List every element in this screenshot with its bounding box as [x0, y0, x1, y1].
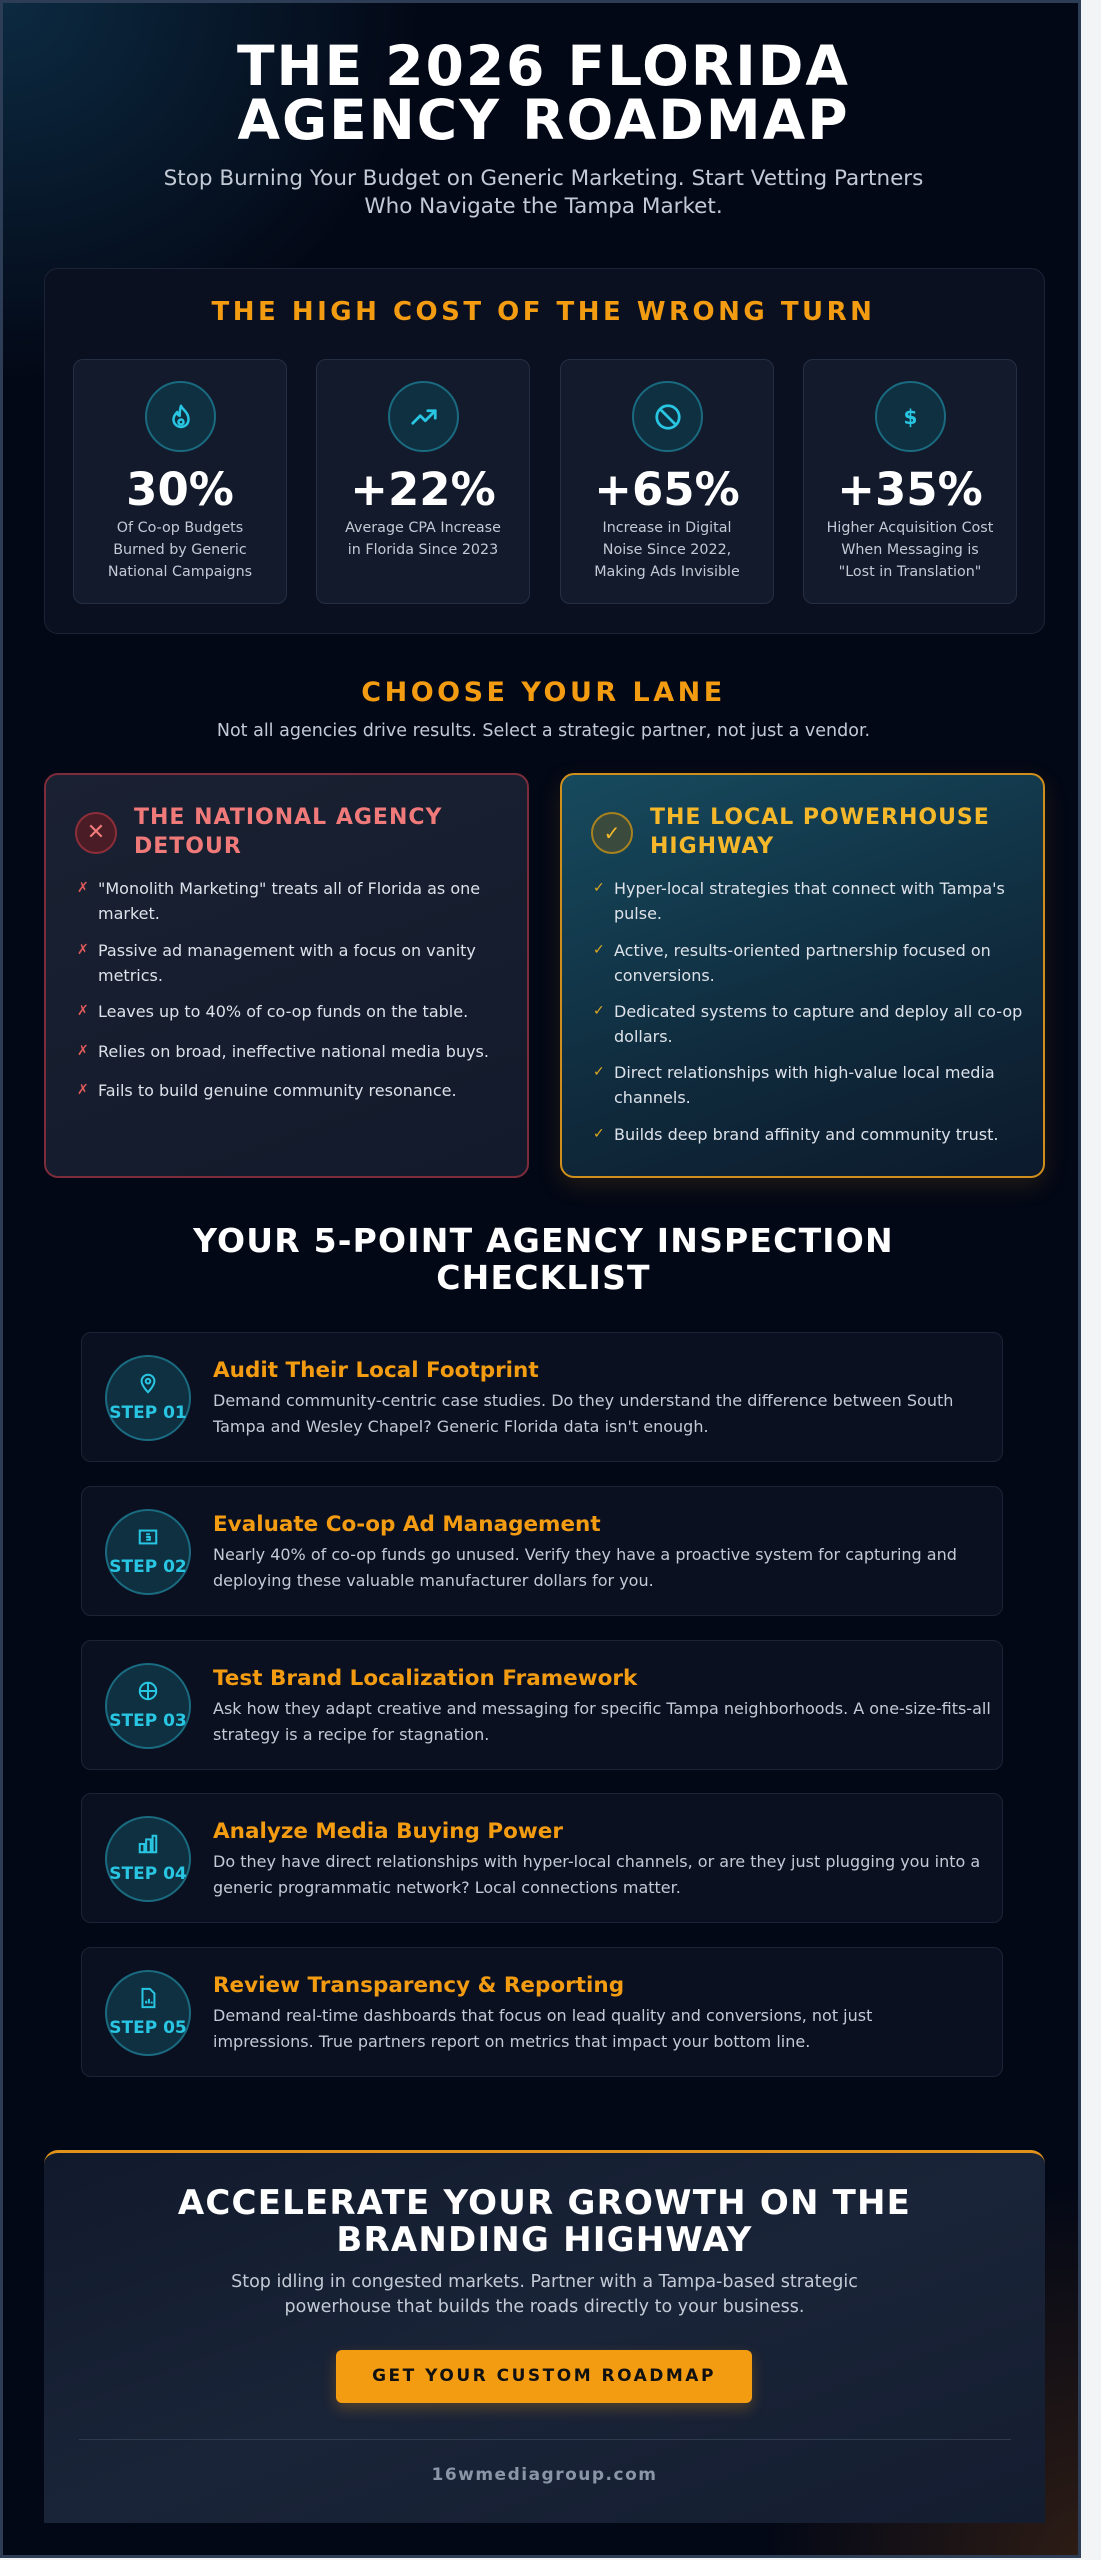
step 01 [81, 1332, 1003, 1462]
cta text: powerhouse that builds the roads directly to your business. [285, 2297, 804, 2317]
title [237, 34, 850, 152]
step 05: Review Transparency & Reporting [213, 1973, 624, 1998]
step 03 [81, 1640, 1003, 1770]
icon: check circle: ✓ [604, 821, 620, 845]
icon: location pin [105, 1355, 191, 1441]
panel: national agency detour: ✗ [77, 1003, 89, 1019]
step 02: Evaluate Co-op Ad Management [213, 1512, 601, 1537]
stat card 2: in Florida Since 2023 [348, 542, 498, 558]
icon: crosshair globe: STEP 03 [109, 1711, 187, 1731]
panel: national agency detour: THE NATIONAL AGENCY [134, 805, 442, 830]
icon: money [105, 1509, 191, 1595]
stat card 4: Higher Acquisition Cost [827, 520, 993, 536]
step 04 [81, 1793, 1003, 1923]
stat card 3: Making Ads Invisible [594, 564, 740, 580]
panel: call to action [44, 2150, 1045, 2523]
panel: local powerhouse highway: Dedicated systems to capture and deploy all co-op dollars. [614, 1002, 1022, 1046]
step 05: Demand real-time dashboards that focus on lead quality and conversions, not just [213, 2006, 872, 2025]
icon: x circle: ✕ [87, 820, 105, 845]
step 01: Audit Their Local Footprint [213, 1358, 539, 1383]
icon: blocked [632, 381, 703, 452]
stat card 2: +22% [350, 463, 496, 516]
panel: national agency detour: Fails to build genuine community resonance. [98, 1081, 457, 1100]
panel: local powerhouse highway: HIGHWAY [650, 834, 774, 859]
step 02: Nearly 40% of co-op funds go unused. Verify they have a proactive system for capturing and deploying these valuable manufacturer dollars for you. [213, 1545, 957, 1590]
panel: high cost stats [44, 268, 1045, 634]
panel: local powerhouse highway: THE LOCAL POWERHOUSE [650, 805, 990, 830]
stat card 1: Burned by Generic [113, 542, 247, 558]
subtitle: Stop Burning Your Budget on Generic Marketing. Start Vetting Partners [164, 166, 923, 191]
stat card 3 [560, 359, 774, 604]
panel: local powerhouse highway: Active, results-oriented partnership focused on conversions. [614, 941, 991, 985]
icon: dollar [875, 381, 946, 452]
step 04: Analyze Media Buying Power [213, 1819, 563, 1844]
panel: local powerhouse highway: ✓ [593, 942, 605, 958]
subtitle: Who Navigate the Tampa Market. [364, 194, 723, 219]
step 02 [81, 1486, 1003, 1616]
cta text: Stop idling in congested markets. Partner with a Tampa-based strategic [231, 2272, 858, 2292]
panel: local powerhouse highway: Builds deep brand affinity and community trust. [614, 1125, 998, 1144]
stat card 4: "Lost in Translation" [839, 564, 981, 580]
icon: check circle [591, 812, 633, 854]
panel: national agency detour [44, 773, 529, 1178]
cta heading: BRANDING HIGHWAY [336, 2220, 753, 2260]
footer url: 16wmediagroup.com [431, 2465, 658, 2485]
stat card 4: When Messaging is [841, 542, 979, 558]
title: THE 2026 FLORIDA [237, 34, 850, 98]
panel: local powerhouse highway: Direct relationships with high-value local media channels. [614, 1063, 995, 1107]
step 03: Ask how they adapt creative and messaging for specific Tampa neighborhoods. A one-size-fits-all strategy is a recipe for stagnation. [213, 1699, 991, 1744]
icon: bar chart [105, 1816, 191, 1902]
panel: local powerhouse highway: ✓ [593, 1126, 605, 1142]
heading: checklist: YOUR 5-POINT AGENCY INSPECTION [193, 1221, 894, 1260]
panel: national agency detour: ✗ [77, 1082, 89, 1098]
panel: national agency detour: "Monolith Marketing" treats all of Florida as one market. [98, 879, 480, 923]
panel: national agency detour: ✗ [77, 1043, 89, 1059]
step 05: impressions. True partners report on metrics that impact your bottom line. [213, 2032, 810, 2051]
icon: report doc [105, 1970, 191, 2056]
panel: national agency detour: Leaves up to 40% of co-op funds on the table. [98, 1002, 468, 1021]
stat card 4 [803, 359, 1017, 604]
panel: local powerhouse highway: ✓ [593, 880, 605, 896]
step 01: Demand community-centric case studies. Do they understand the difference between South Tampa and Wesley Chapel? Generic Florida data isn't enough. [213, 1391, 953, 1436]
icon: report doc: STEP 05 [109, 2018, 187, 2038]
stat card 3: Increase in Digital [602, 520, 732, 536]
step 03: Test Brand Localization Framework [213, 1666, 637, 1691]
title: AGENCY ROADMAP [237, 88, 850, 152]
step 05 [81, 1947, 1003, 2077]
icon: trend up [388, 381, 459, 452]
panel: national agency detour: ✗ [77, 880, 89, 896]
cta heading: ACCELERATE YOUR GROWTH ON THE [178, 2183, 911, 2223]
panel: national agency detour: Passive ad management with a focus on vanity metrics. [98, 941, 476, 985]
stat card 3: Noise Since 2022, [603, 542, 731, 558]
icon: crosshair globe [105, 1663, 191, 1749]
stat card 3: +65% [594, 463, 740, 516]
button: GET YOUR CUSTOM ROADMAP [372, 2366, 716, 2386]
panel: national agency detour: Relies on broad, ineffective national media buys. [98, 1042, 489, 1061]
stat card 1 [73, 359, 287, 604]
panel: national agency detour: DETOUR [134, 834, 242, 859]
cta heading [178, 2183, 911, 2260]
panel: local powerhouse highway: ✓ [593, 1003, 605, 1019]
stat card 2: Average CPA Increase [345, 520, 501, 536]
panel: local powerhouse highway [560, 773, 1045, 1178]
icon: dollar: $ [904, 404, 917, 428]
heading: checklist [192, 1221, 894, 1297]
step 04: Do they have direct relationships with hyper-local channels, or are they just plugging you into a generic programmatic network? Local connections matter. [213, 1852, 980, 1897]
stat card 4: +35% [837, 463, 983, 516]
panel: national agency detour: ✗ [77, 942, 89, 958]
lane subtitle: Not all agencies drive results. Select a strategic partner, not just a vendor. [217, 721, 870, 741]
stat card 1: 30% [126, 463, 234, 516]
cta text [231, 2272, 858, 2317]
stat card 2 [316, 359, 530, 604]
icon: bar chart: STEP 04 [109, 1864, 187, 1884]
subtitle [164, 166, 923, 219]
icon: x circle [75, 812, 117, 854]
panel: local powerhouse highway: ✓ [593, 1064, 605, 1080]
icon: money: STEP 02 [109, 1557, 187, 1577]
button [336, 2350, 752, 2403]
icon: flame [145, 381, 216, 452]
stat card 1: National Campaigns [108, 564, 252, 580]
heading: checklist: CHECKLIST [436, 1258, 651, 1297]
icon: location pin: STEP 01 [109, 1403, 187, 1423]
panel: local powerhouse highway: Hyper-local strategies that connect with Tampa's pulse. [614, 879, 1005, 923]
stat card 1: Of Co-op Budgets [117, 520, 243, 536]
heading: choose your lane: CHOOSE YOUR LANE [361, 677, 726, 708]
heading: high cost: THE HIGH COST OF THE WRONG TURN [212, 297, 875, 327]
